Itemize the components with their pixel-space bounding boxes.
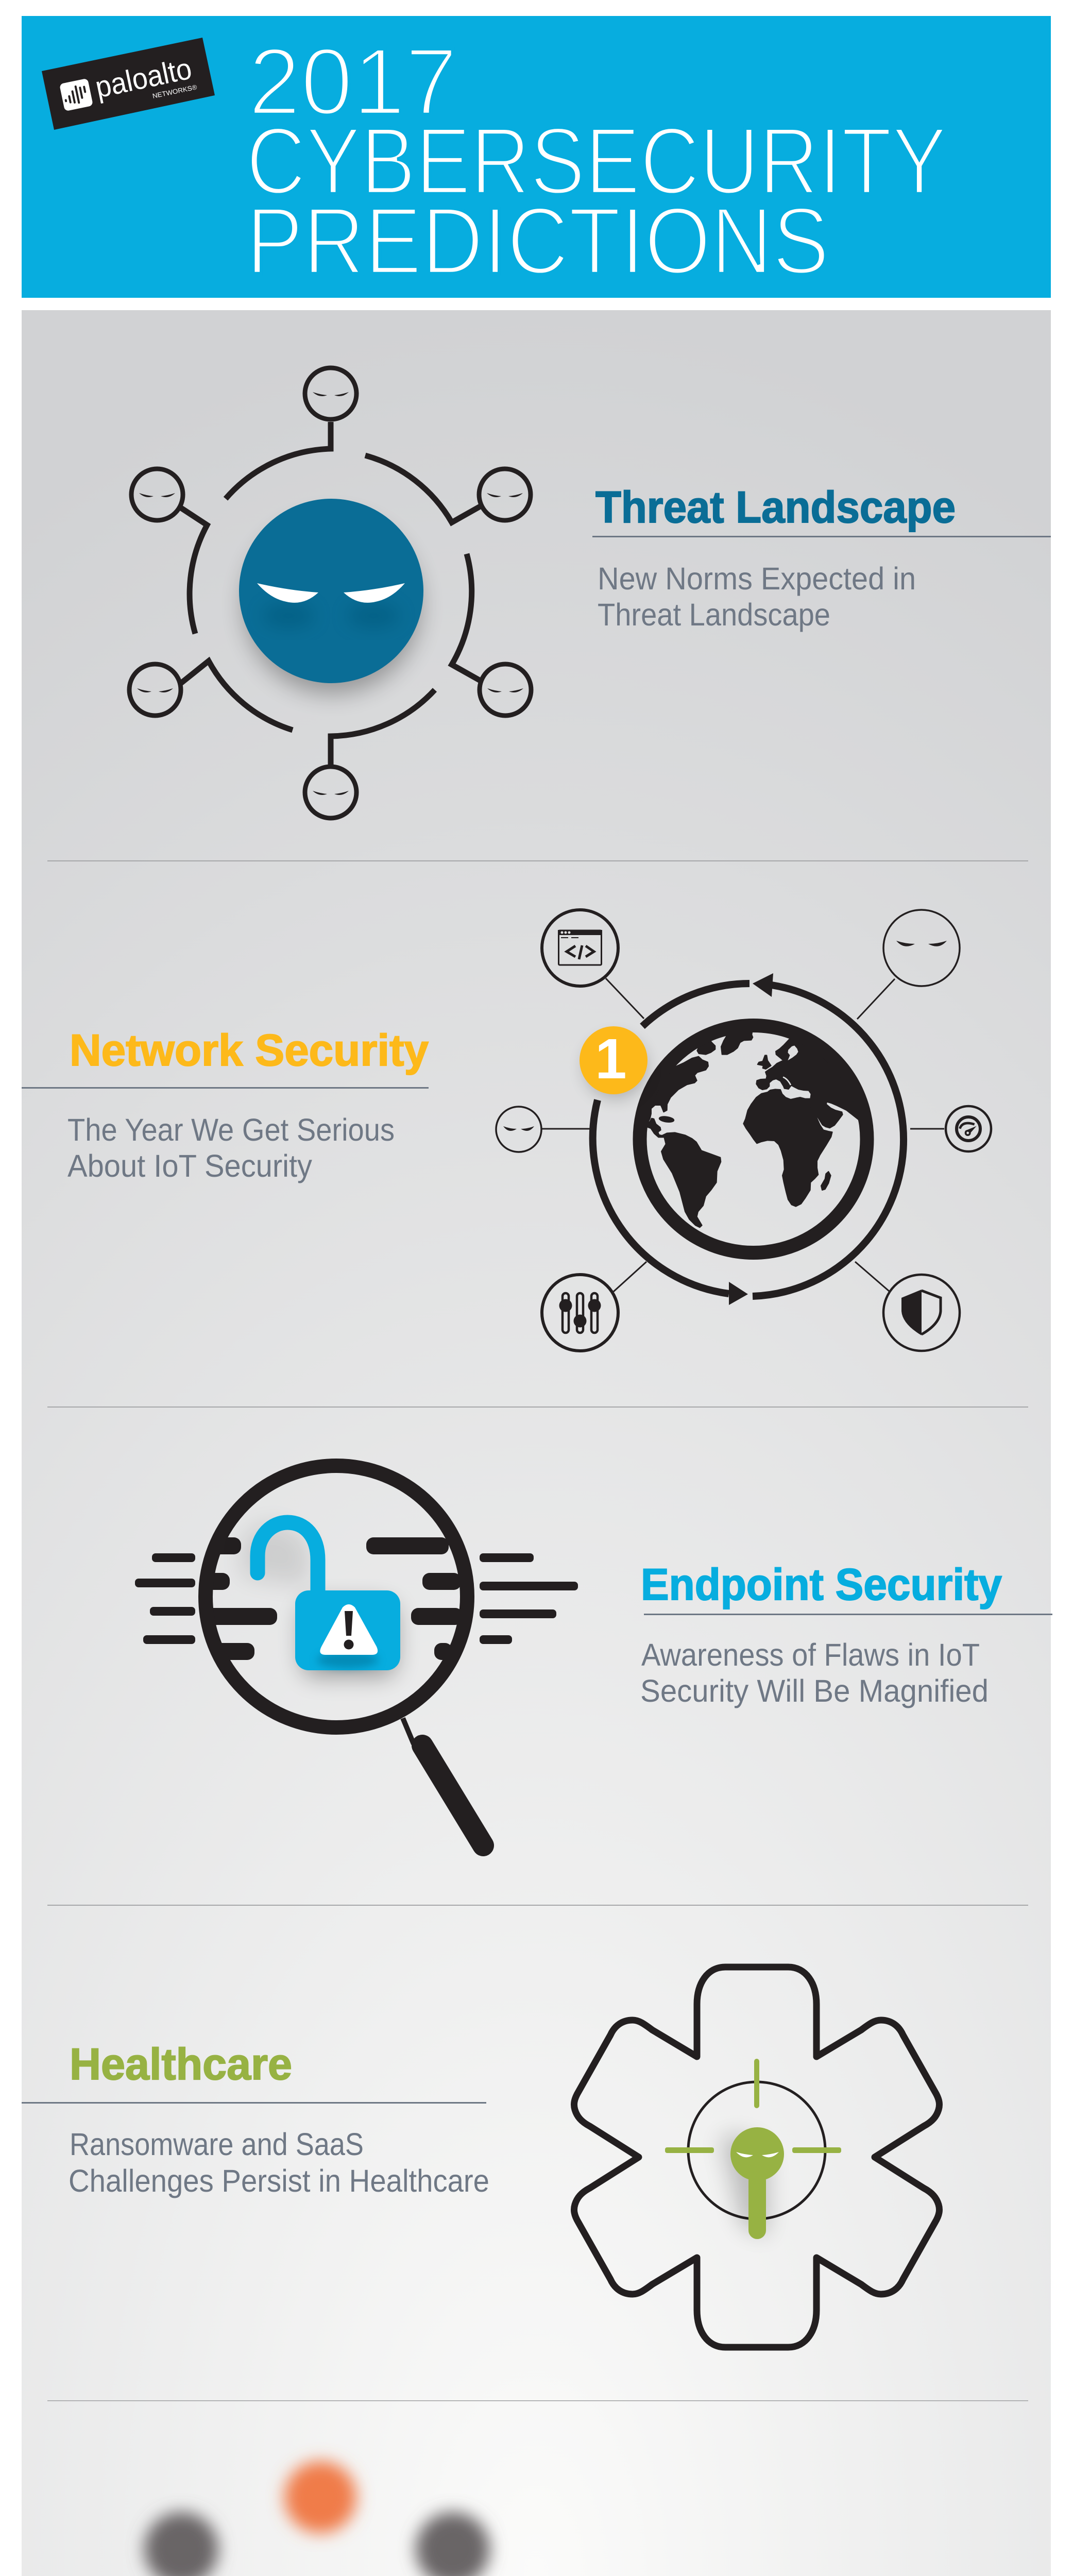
heading: Network Security	[70, 1026, 429, 1075]
heading: Endpoint Security	[641, 1560, 1002, 1609]
section: healthcare	[22, 1967, 940, 2347]
header banner	[22, 16, 1051, 298]
motion bars	[135, 1537, 578, 1660]
section: endpoint security	[135, 1466, 1052, 1845]
section: threat landscape	[129, 368, 1051, 818]
globe	[640, 1025, 867, 1253]
icon: shield	[883, 1275, 960, 1351]
section: network security	[22, 910, 991, 1351]
icon: green attacker figure	[730, 2127, 784, 2239]
heading: Healthcare	[70, 2040, 292, 2089]
icon: magnifier with open lock	[135, 1466, 578, 1845]
icon: star of life with target	[574, 1967, 940, 2347]
heading rule	[22, 2102, 486, 2104]
title: 2017	[248, 29, 457, 135]
section: financial services (blurred)	[94, 2461, 999, 2576]
heading rule	[644, 1614, 1052, 1615]
title: PREDICTIONS	[246, 188, 829, 294]
description	[67, 1112, 395, 1183]
icon: blurred network	[94, 2461, 544, 2576]
icon: sliders	[542, 1275, 618, 1351]
icon: yellow number badge: 1	[595, 1027, 627, 1091]
description	[598, 561, 916, 632]
description: Threat Landscape	[598, 597, 830, 632]
logo: Palo Alto Networks: NETWORKS®	[152, 83, 198, 100]
description	[640, 1637, 989, 1708]
icon: crosshair marks	[665, 2059, 841, 2153]
icon: threat network	[129, 368, 531, 818]
icon: central hooded face	[239, 499, 423, 683]
description	[69, 2127, 489, 2198]
circular arrows	[593, 973, 904, 1305]
icon: face upper right	[883, 910, 960, 986]
icon: yellow number badge	[580, 1026, 648, 1098]
logo: Palo Alto Networks: paloalto	[92, 52, 195, 105]
icon: gauge	[946, 1106, 991, 1151]
icon: open padlock	[242, 1522, 400, 1677]
icon: face left	[496, 1107, 541, 1152]
description: The Year We Get Serious	[67, 1112, 395, 1147]
icon: globe network	[496, 910, 991, 1351]
description: Awareness of Flaws in IoT	[641, 1637, 980, 1672]
description: Challenges Persist in Healthcare	[69, 2163, 489, 2198]
description: New Norms Expected in	[598, 561, 916, 596]
heading rule	[22, 1087, 429, 1089]
description: About IoT Security	[67, 1148, 312, 1183]
heading rule	[592, 536, 1051, 537]
description: Ransomware and SaaS	[70, 2127, 364, 2162]
description: Security Will Be Magnified	[640, 1673, 989, 1708]
title: CYBERSECURITY	[246, 108, 947, 214]
title	[246, 29, 947, 294]
heading: Threat Landscape	[595, 483, 956, 532]
logo: Palo Alto Networks	[42, 38, 215, 130]
icon: code window	[542, 910, 618, 986]
